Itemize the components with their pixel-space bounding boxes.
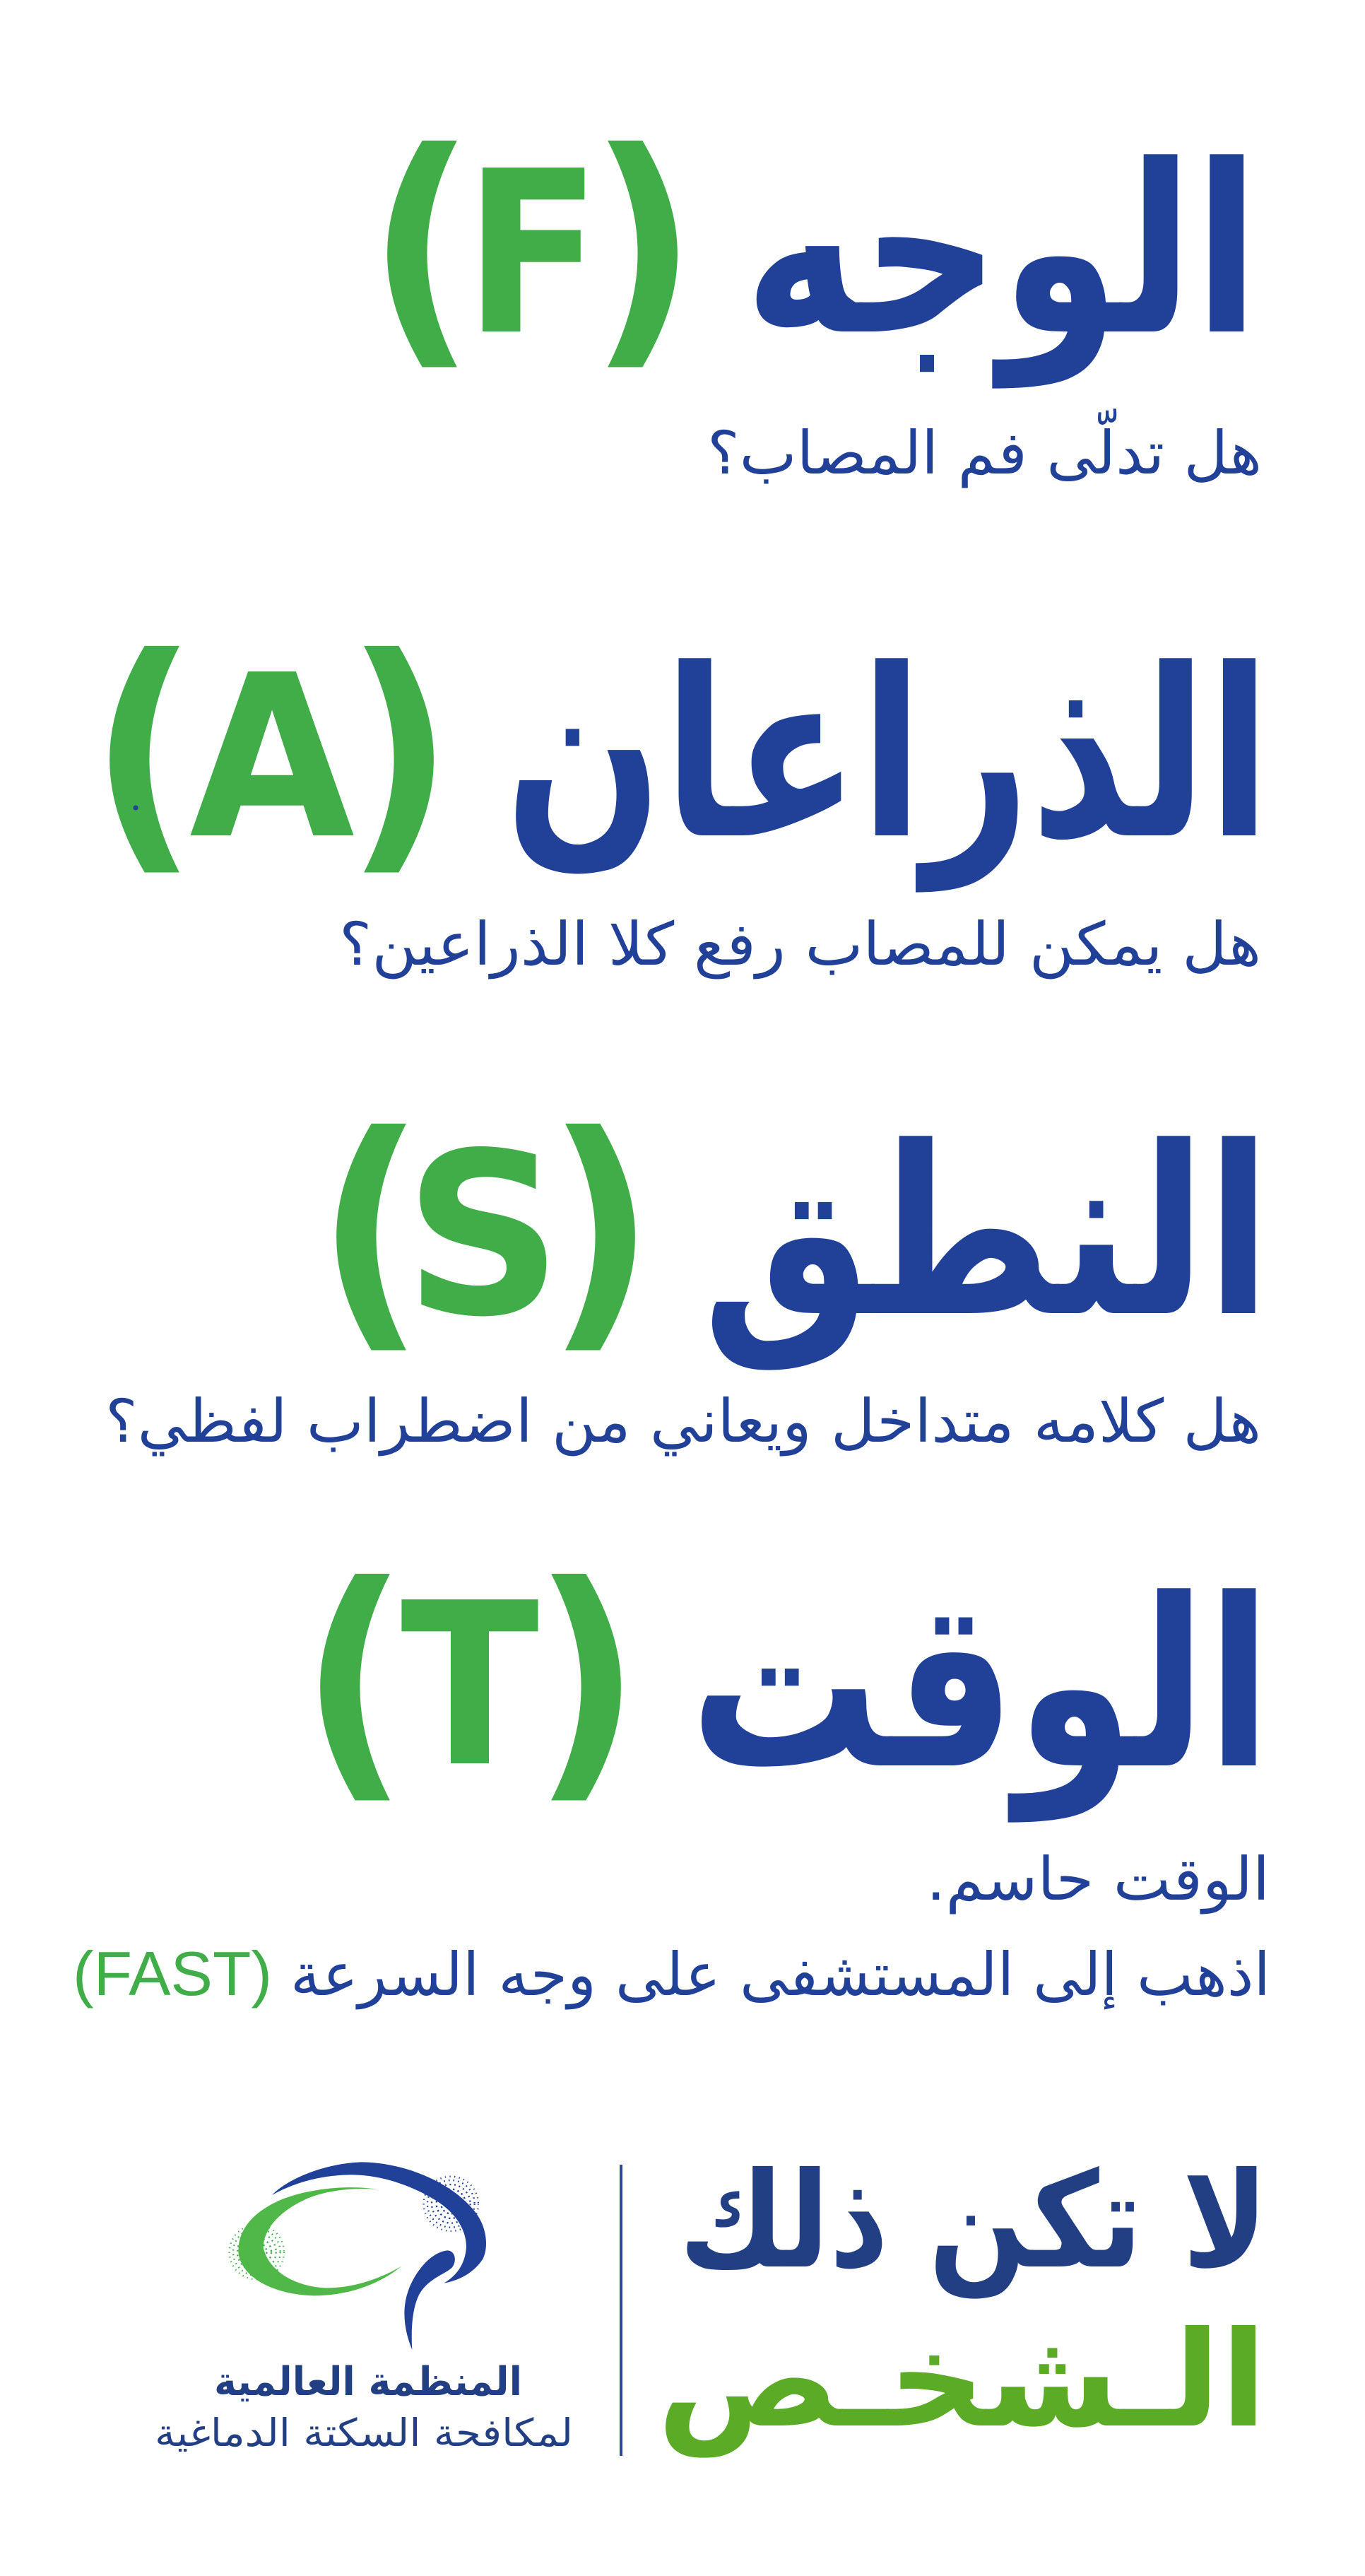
slogan: person: الـشخـص xyxy=(657,2303,1267,2458)
letter: A: A xyxy=(189,627,356,888)
right parenthesis T: ) xyxy=(532,1531,642,1827)
left parenthesis T: ( xyxy=(300,1531,409,1827)
section: arms xyxy=(89,603,1271,980)
left parenthesis A: ( xyxy=(89,603,199,899)
icon: green crescent xyxy=(238,2187,401,2295)
letter: T: T xyxy=(401,1555,540,1816)
right parenthesis F: ) xyxy=(589,98,698,394)
letter: S: S xyxy=(404,1105,562,1366)
left parenthesis S: ( xyxy=(316,1081,425,1377)
question: speech: هل كلامه متداخل ويعاني من اضطراب لفظي؟ xyxy=(105,1387,1261,1457)
icon: blue stem xyxy=(404,2250,455,2350)
section: face xyxy=(367,98,1262,488)
letter: F: F xyxy=(464,123,601,384)
heading: face: الوجه xyxy=(744,115,1260,390)
section: time xyxy=(73,1531,1272,2010)
right parenthesis S: ) xyxy=(546,1081,656,1377)
section: speech xyxy=(105,1081,1271,1457)
icon: green dots xyxy=(230,2225,284,2279)
text: (FAST): (FAST) xyxy=(73,1939,272,2009)
logo xyxy=(230,2162,486,2350)
right parenthesis A: ) xyxy=(345,603,454,899)
logo text: organisation subtitle: لمكافحة السكتة الدماغية xyxy=(155,2411,573,2455)
text: time is critical: الوقت حاسم.‏ xyxy=(926,1845,1270,1915)
small blue dot xyxy=(133,806,138,810)
question: arms: هل يمكن للمصاب رفع كلا الذراعين؟ xyxy=(339,910,1261,980)
icon: blue dots xyxy=(424,2177,478,2231)
logo text: organisation name: المنظمة العالمية xyxy=(214,2359,522,2405)
icon: blue arc xyxy=(272,2162,486,2283)
text: go to hospital: اذهب إلى المستشفى على وجه السرعة xyxy=(290,1940,1270,2010)
left parenthesis F: ( xyxy=(367,98,476,394)
footer divider xyxy=(620,2165,622,2456)
slogan: don't be that: لا تكن ذلك xyxy=(679,2144,1268,2299)
question: face: هل تدلّى فم المصاب؟ xyxy=(707,409,1262,488)
